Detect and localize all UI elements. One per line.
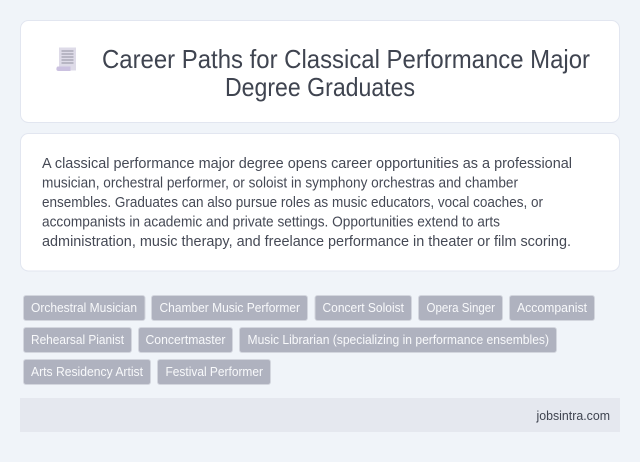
text block: description: accompanists in academic and private settings. Opportunities extend to arts [42, 214, 500, 230]
tag: Concert Soloist [315, 296, 412, 320]
text block: description: musician, orchestral performer, or soloist in symphony orchestras and chamber [42, 176, 518, 192]
tag: Concertmaster: Concertmaster [146, 332, 226, 347]
tag: Orchestral Musician: Orchestral Musician [31, 300, 137, 315]
tag: Arts Residency Artist [24, 360, 150, 384]
tag: Festival Performer: Festival Performer [166, 364, 264, 379]
tag: Opera Singer [418, 296, 502, 320]
text block: description: ensembles. Graduates can also pursue roles as music educators, vocal coaches, or [42, 195, 543, 211]
tag: Rehearsal Pianist: Rehearsal Pianist [31, 332, 124, 347]
footer: source: jobsintra.com [536, 408, 610, 423]
tag: Opera Singer: Opera Singer [426, 300, 496, 315]
tag: Concert Soloist: Concert Soloist [322, 300, 404, 315]
tag: Orchestral Musician [24, 296, 145, 320]
tag: Accompanist: Accompanist [517, 300, 587, 315]
tag: Chamber Music Performer [152, 296, 308, 320]
tag list: career paths [24, 296, 594, 384]
tag: Music Librarian: Music Librarian (specializing in performance ensembles) [248, 332, 549, 347]
footer bar [20, 398, 620, 432]
tag: Arts Residency Artist: Arts Residency Artist [31, 364, 143, 379]
text block: description [42, 156, 572, 250]
title: Career Paths for Classical Performance Major [102, 44, 590, 74]
title: Degree Graduates [225, 72, 415, 102]
tag: Festival Performer [158, 360, 270, 384]
tag: Music Librarian [240, 328, 556, 352]
tag: Concertmaster [138, 328, 232, 352]
title [102, 44, 590, 102]
tag: Rehearsal Pianist [24, 328, 132, 352]
tag: Accompanist [510, 296, 594, 320]
text block: description: administration, music therapy, and freelance performance in theater or film scoring. [42, 234, 571, 250]
panel: description [20, 134, 620, 271]
icon: paper scroll [56, 48, 76, 71]
panel: title card [20, 20, 620, 122]
text block: description: A classical performance major degree opens career opportunities as a professional [42, 156, 572, 172]
tag: Chamber Music Performer: Chamber Music Performer [160, 300, 301, 315]
